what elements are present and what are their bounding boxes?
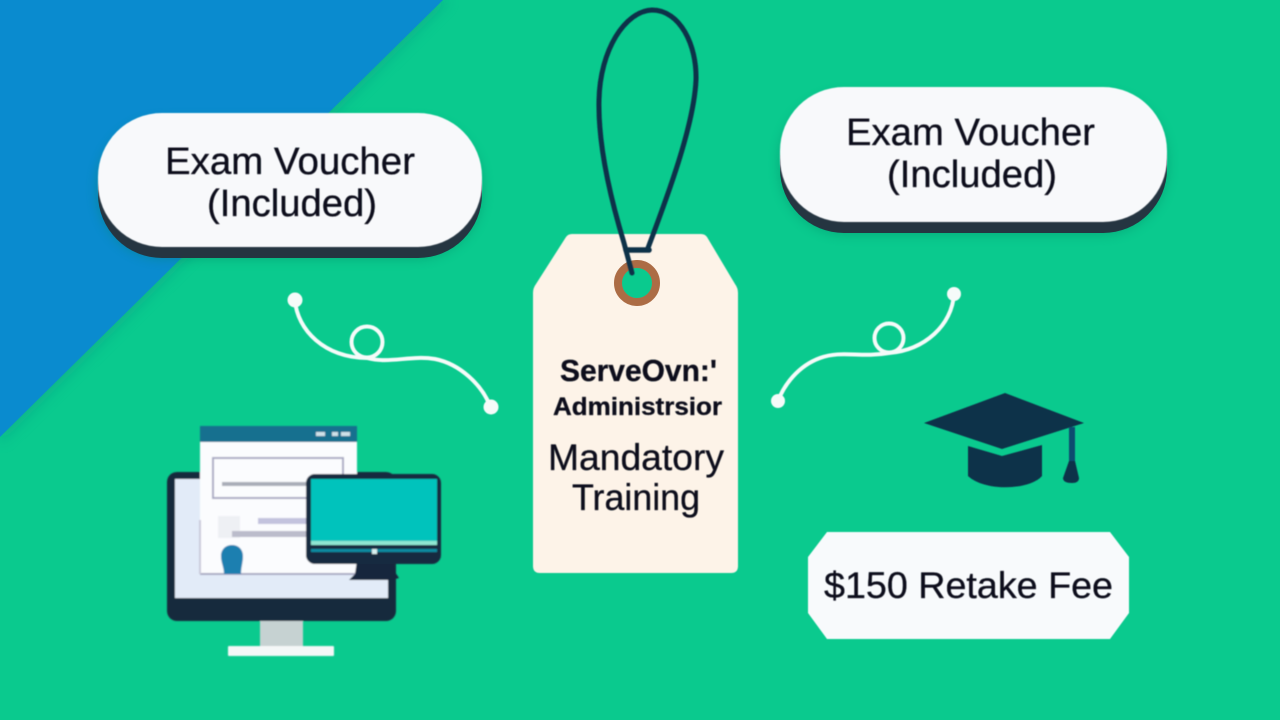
- tag title: ServeOvn:': [560, 353, 717, 388]
- left pill label: (Included): [207, 183, 377, 225]
- right pill label: Exam Voucher: [846, 112, 1095, 154]
- tag subtitle: Training: [572, 477, 700, 518]
- right pill label: [846, 112, 1095, 196]
- icon: graduation cap: [924, 393, 1084, 487]
- icon: desktop computer with certificate: [167, 426, 441, 656]
- left curly connector: [288, 292, 498, 414]
- right pill label: (Included): [887, 154, 1057, 196]
- monitor stand: [228, 618, 334, 656]
- tag eyelet: [618, 264, 656, 302]
- left pill label: [165, 141, 415, 225]
- right curly connector: [771, 287, 961, 408]
- retake fee label: $150 Retake Fee: [824, 565, 1113, 606]
- tag string: [599, 10, 696, 273]
- blue diagonal corner: [0, 0, 450, 444]
- tag body with punched hole: [533, 234, 738, 573]
- small monitor: [306, 474, 441, 580]
- tag subtitle: [548, 437, 725, 518]
- left pill: exam voucher: [98, 113, 482, 258]
- large monitor: [167, 472, 396, 621]
- retake fee badge: [808, 532, 1129, 639]
- tag title: [548, 353, 725, 518]
- left pill label: Exam Voucher: [165, 141, 415, 183]
- tag title: Administrsior: [553, 393, 722, 421]
- certificate window: [199, 426, 357, 575]
- certificate seal: [221, 545, 243, 574]
- right pill: exam voucher: [780, 87, 1167, 234]
- price tag: [533, 10, 738, 573]
- tag subtitle: Mandatory: [548, 437, 725, 478]
